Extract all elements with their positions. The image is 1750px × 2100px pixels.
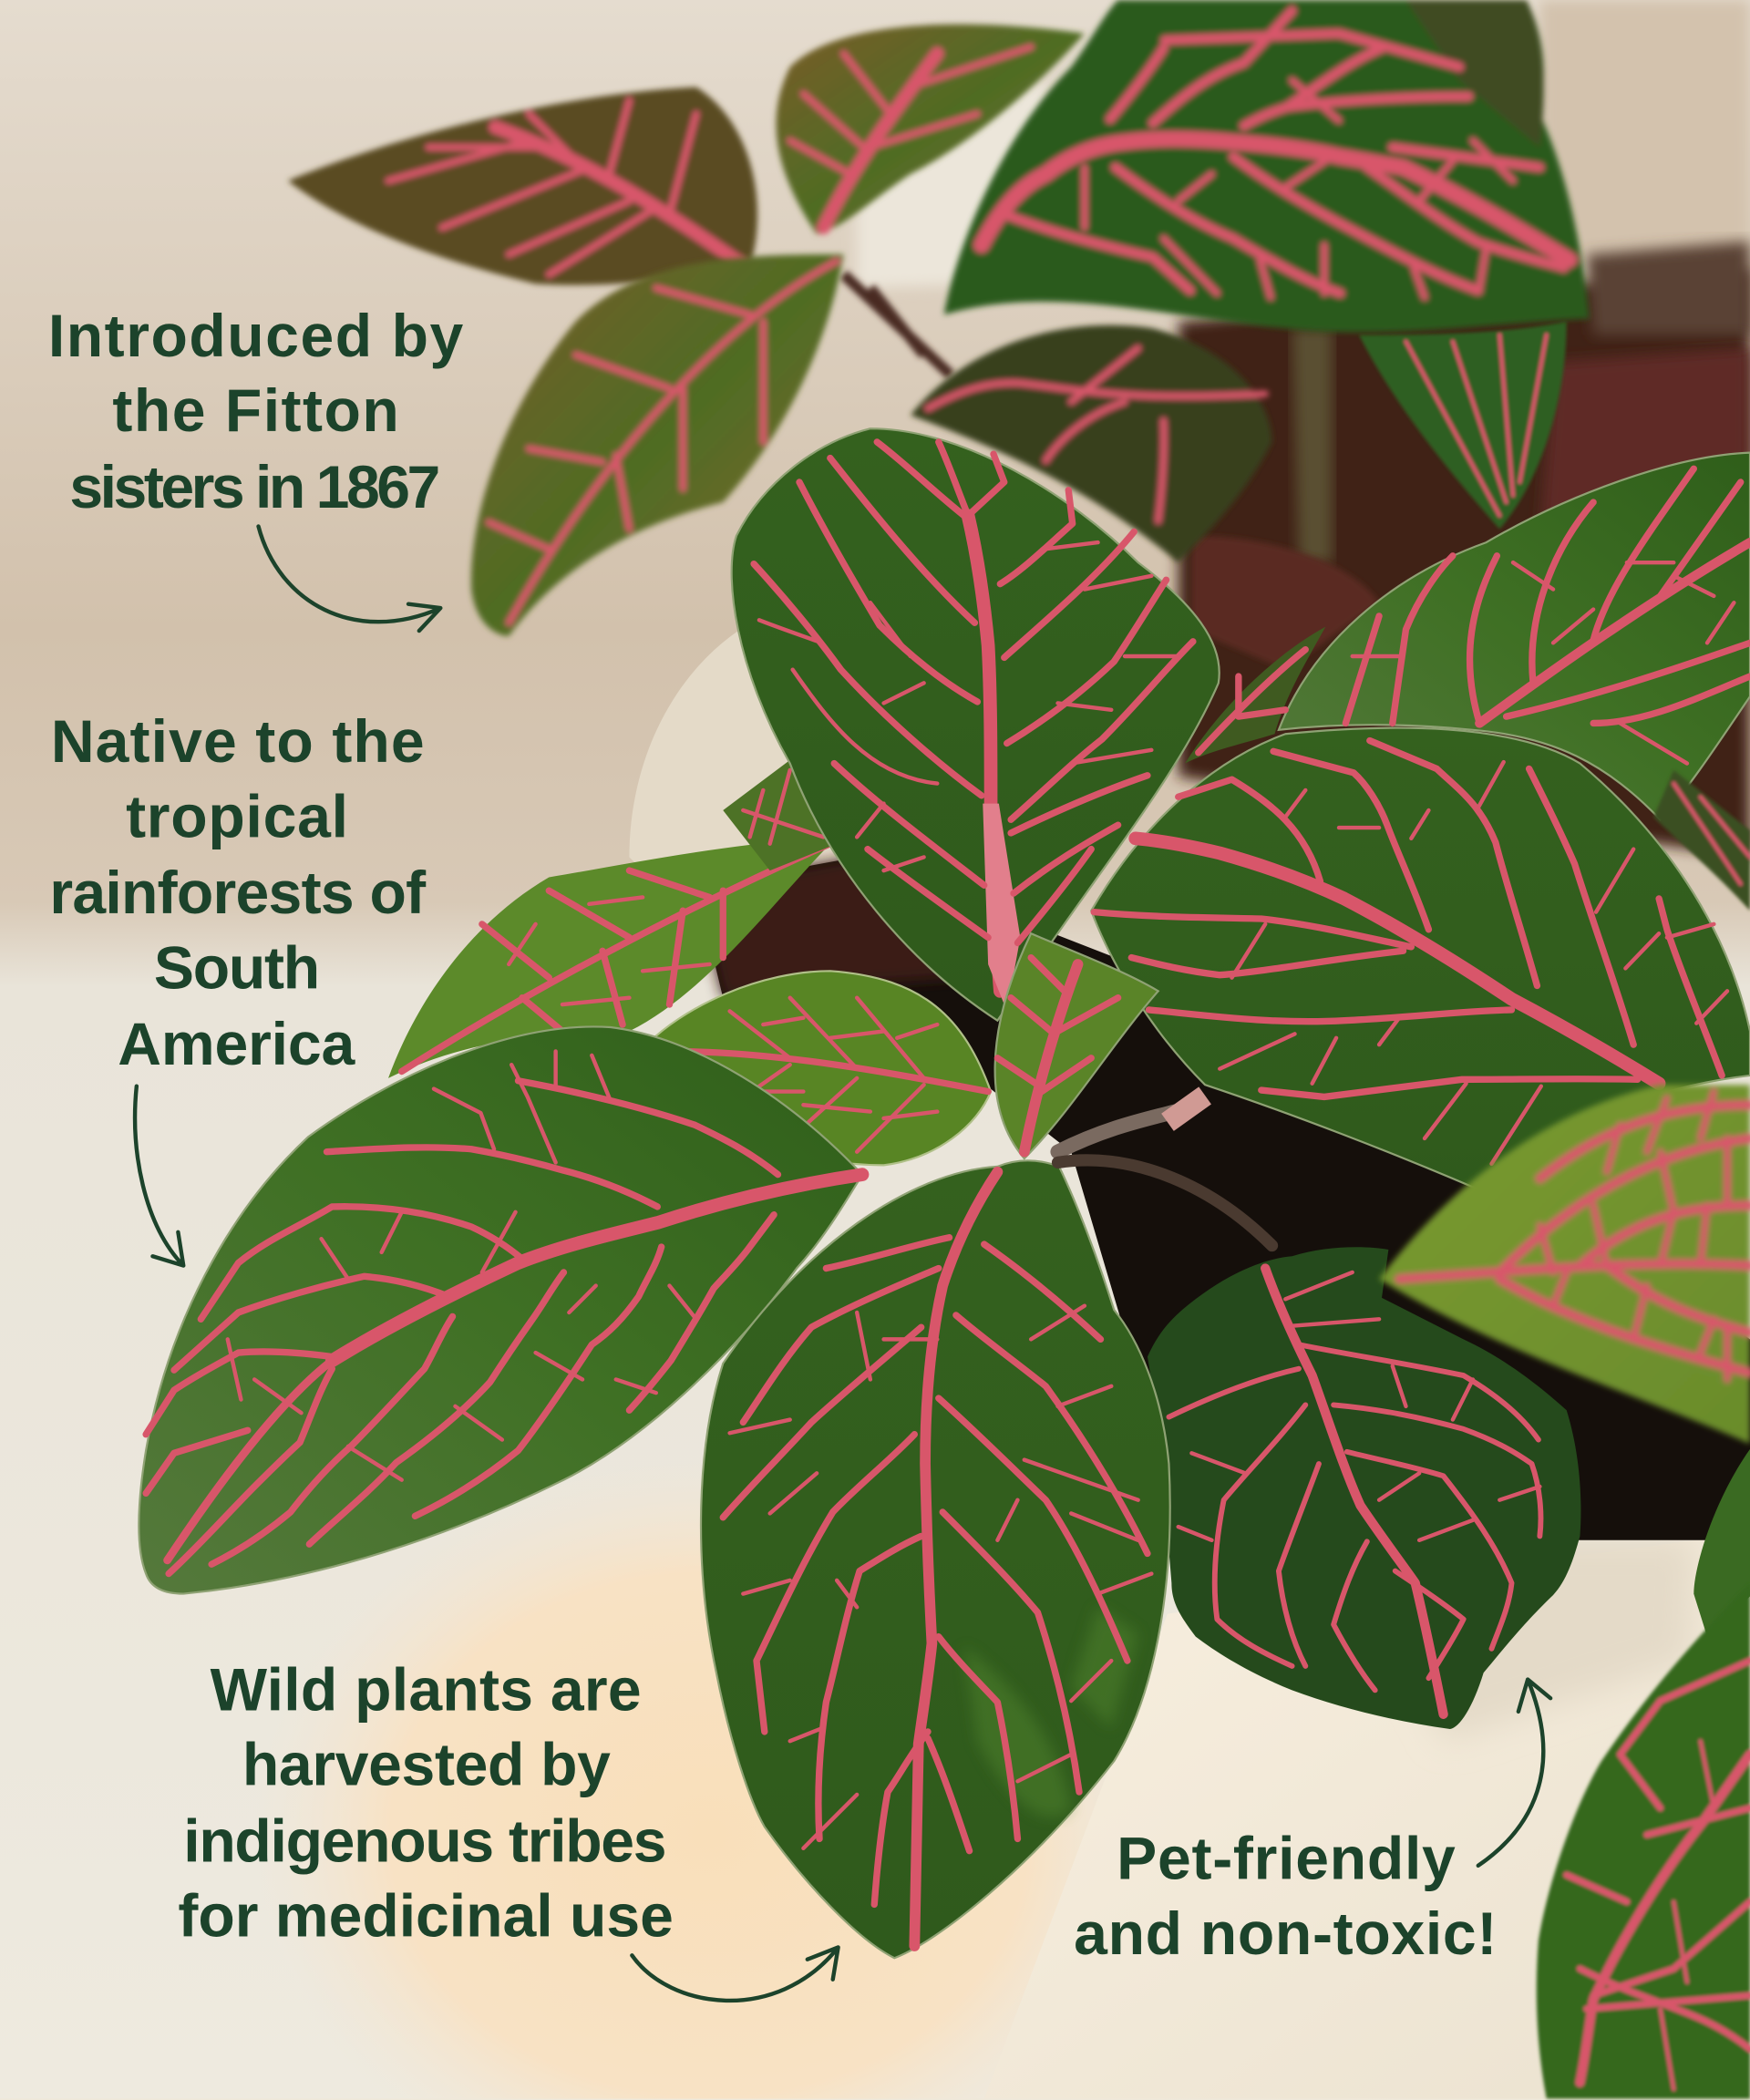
- leaf: top middle, blurred: [776, 25, 1085, 234]
- callout text: wild harvest: for medicinal use: [178, 1883, 674, 1951]
- stem: fuzzy stalk: [1058, 1096, 1272, 1246]
- arrow: to large leaf: [135, 1086, 183, 1266]
- leaf: top large: [944, 0, 1590, 333]
- callout: medicinal use: [178, 1656, 839, 2001]
- callout text: history: sisters in 1867: [69, 454, 440, 521]
- callout text: history: Introduced by: [48, 303, 463, 370]
- leaf: narrow behind right big leaf: [1185, 627, 1325, 764]
- leaf: small upright at centre: [995, 933, 1158, 1158]
- leaf: right light green: [1379, 1085, 1750, 1444]
- arrow: to bottom leaf: [632, 1947, 839, 2001]
- leaf: upper right: [1279, 453, 1750, 819]
- callout text: rainforests: South: [154, 934, 320, 1002]
- leaf: centre small horizontal: [640, 971, 991, 1165]
- callout text: wild harvest: harvested by: [242, 1732, 611, 1799]
- plant pot: [629, 616, 1750, 2099]
- callout text: rainforests: tropical: [126, 783, 348, 850]
- callout text: history: the Fitton: [112, 377, 399, 445]
- leaf: small curled at centre left: [723, 750, 837, 870]
- callout text: rainforests: rainforests of: [49, 860, 427, 927]
- leaf: right edge small lower: [1693, 1449, 1750, 1637]
- leaf: upper left drooping, blurred: [471, 254, 843, 636]
- leaf: right big: [1091, 728, 1750, 1199]
- leaf: bottom centre: [701, 1160, 1170, 1958]
- callout text: non-toxic: Pet-friendly: [1117, 1826, 1456, 1893]
- leaf: centre top: [732, 428, 1220, 1021]
- leaf: top left, blurred: [288, 88, 757, 285]
- leaf: behind centre, blurred: [911, 325, 1272, 562]
- callout text: rainforests: America: [118, 1011, 356, 1078]
- leaf: behind right, hanging: [1359, 322, 1567, 529]
- leaf: right edge small: [1653, 770, 1750, 911]
- leaf: left middle, behind: [388, 837, 837, 1078]
- arrow: to dark leaf: [1478, 1680, 1550, 1866]
- callout: Fitton sisters: [48, 303, 463, 631]
- callout text: wild harvest: indigenous tribes: [183, 1807, 667, 1875]
- leaf: large lower left: [139, 1026, 862, 1594]
- dark soil and background foliage: [696, 241, 1750, 1540]
- callout text: rainforests: Native to the: [51, 708, 425, 776]
- callout: native range: [49, 708, 427, 1266]
- callout text: non-toxic: and non-toxic!: [1074, 1900, 1497, 1968]
- leaf: dark lower right: [1148, 1247, 1580, 1729]
- arrow: to upper leaf: [259, 526, 440, 631]
- leaf: right bottom: [1537, 1583, 1750, 2099]
- callout: pet friendly: [1074, 1680, 1550, 1968]
- callout text: wild harvest: Wild plants are: [211, 1656, 642, 1724]
